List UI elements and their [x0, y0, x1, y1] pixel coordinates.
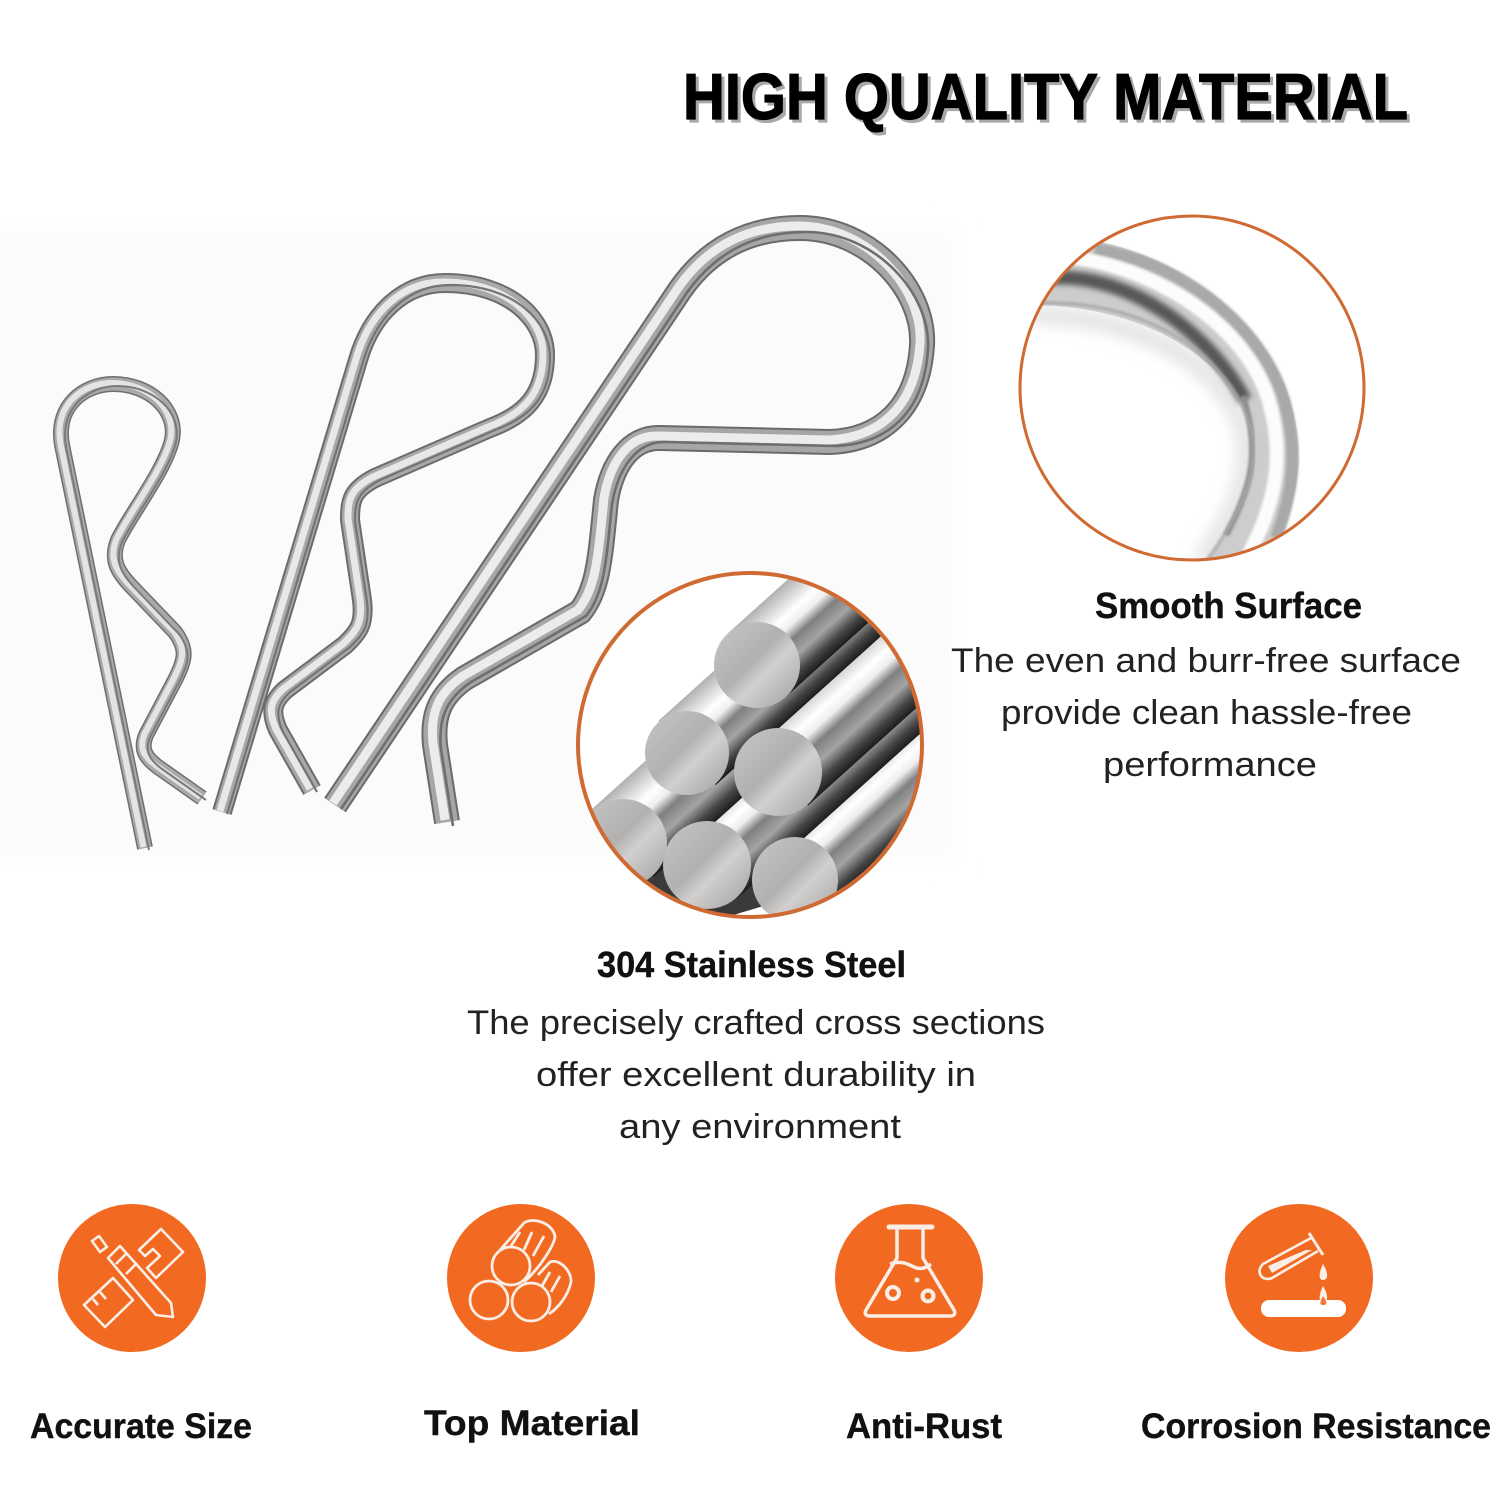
text: stainless steel description: offer excellent durability in [536, 1056, 976, 1094]
panel: smooth surface close-up [1020, 216, 1364, 565]
text: stainless steel description [467, 1004, 1045, 1146]
text: stainless steel description: any environment [619, 1108, 902, 1146]
text: smooth surface description: performance [1103, 746, 1317, 784]
text: stainless steel description: The precisely crafted cross sections [467, 1004, 1045, 1042]
label: accurate size: Accurate Size [30, 1407, 252, 1446]
title: HIGH QUALITY MATERIAL [683, 60, 1408, 133]
panel: stainless steel rods close-up [576, 571, 924, 919]
heading: smooth surface: Smooth Surface [1095, 585, 1362, 626]
photo backdrop [0, 232, 955, 857]
icon: flask [835, 1204, 983, 1352]
photo: three stainless steel R-pins [59, 226, 928, 850]
text: smooth surface description [951, 642, 1461, 784]
label: top material: Top Material [424, 1404, 640, 1443]
small pin [59, 383, 206, 850]
text: smooth surface description: provide clean hassle-free [1001, 694, 1412, 732]
icon: test tube dripping corrosive liquid [1225, 1204, 1373, 1352]
medium pin [220, 282, 550, 814]
large pin [333, 226, 928, 826]
label: corrosion resistance: Corrosion Resistance [1141, 1407, 1491, 1446]
icon: pencil and ruler [58, 1204, 206, 1352]
text: smooth surface description: The even and burr-free surface [951, 642, 1461, 680]
label: anti-rust: Anti-Rust [846, 1407, 1002, 1446]
icon: stack of rods [447, 1204, 595, 1352]
heading: 304 stainless steel: 304 Stainless Steel [597, 944, 906, 985]
